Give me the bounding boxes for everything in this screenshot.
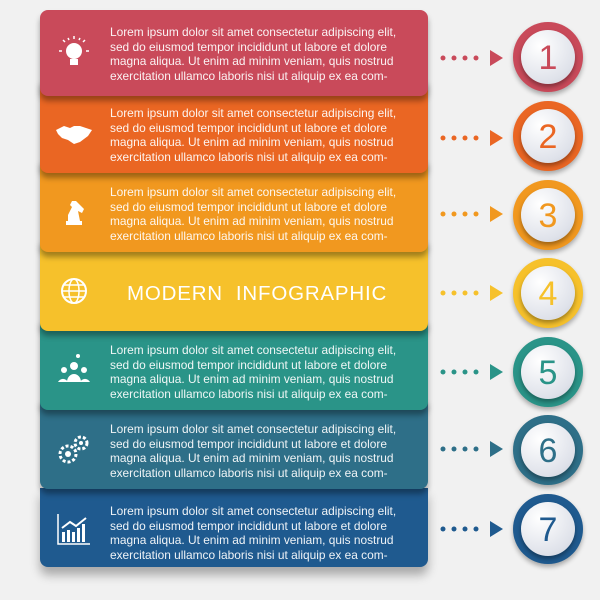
- icon: chess knight: [66, 201, 84, 225]
- circle 5: [513, 337, 583, 407]
- circle 3: [513, 180, 583, 250]
- text 5: [110, 343, 396, 401]
- text 1: Lorem ipsum dolor sit amet consectetur adipiscing elit,: [110, 25, 396, 39]
- arrow 7: [440, 521, 503, 537]
- text 7: [110, 504, 396, 562]
- circle 5: 5: [539, 354, 557, 392]
- circle 6: 6: [539, 432, 557, 470]
- arrow 6: [440, 441, 503, 457]
- text 7: Lorem ipsum dolor sit amet consectetur adipiscing elit,: [110, 504, 396, 518]
- icon: people: [58, 354, 90, 382]
- text 3: magna aliqua. Ut enim ad minim veniam, quis nostrud: [110, 214, 394, 228]
- text 3: exercitation ullamco laboris nisi ut aliquip ex ea com-: [110, 229, 388, 243]
- circle 2: [513, 101, 583, 171]
- panel 6: slate teal: [40, 400, 428, 489]
- circle 1: [513, 22, 583, 92]
- text 3: sed do eiusmod tempor incididunt ut labore et dolore: [110, 200, 387, 214]
- panel 3: amber: [40, 160, 428, 252]
- text 6: magna aliqua. Ut enim ad minim veniam, quis nostrud: [110, 451, 394, 465]
- circle 4: 4: [539, 275, 557, 313]
- text 2: magna aliqua. Ut enim ad minim veniam, quis nostrud: [110, 135, 394, 149]
- panel 4: yellow title: [40, 240, 428, 331]
- panel 2: orange: [40, 80, 428, 173]
- panel 5: teal: [40, 320, 428, 410]
- circle 7: 7: [539, 511, 557, 549]
- circle 3: 3: [539, 197, 557, 235]
- panel 7: blue: [40, 488, 428, 567]
- text 3: [110, 185, 396, 243]
- text 1: magna aliqua. Ut enim ad minim veniam, quis nostrud: [110, 54, 394, 68]
- circle 7: [513, 494, 583, 564]
- text 5: Lorem ipsum dolor sit amet consectetur adipiscing elit,: [110, 343, 396, 357]
- text 2: [110, 106, 396, 164]
- circle 1: 1: [539, 39, 557, 77]
- text 5: exercitation ullamco laboris nisi ut aliquip ex ea com-: [110, 387, 388, 401]
- text 2: Lorem ipsum dolor sit amet consectetur adipiscing elit,: [110, 106, 396, 120]
- arrow 5: [440, 364, 503, 380]
- text 7: sed do eiusmod tempor incididunt ut labore et dolore: [110, 519, 387, 533]
- text 1: exercitation ullamco laboris nisi ut aliquip ex ea com-: [110, 69, 388, 83]
- text 6: [110, 422, 396, 480]
- arrow 4: [440, 285, 503, 301]
- icon: handshake: [56, 126, 92, 144]
- icon: globe: [61, 278, 87, 304]
- text 5: sed do eiusmod tempor incididunt ut labore et dolore: [110, 358, 387, 372]
- text 3: Lorem ipsum dolor sit amet consectetur adipiscing elit,: [110, 185, 396, 199]
- text 1: sed do eiusmod tempor incididunt ut labore et dolore: [110, 40, 387, 54]
- panel 1: red: [40, 10, 428, 96]
- circle 2: 2: [539, 118, 557, 156]
- text 6: Lorem ipsum dolor sit amet consectetur adipiscing elit,: [110, 422, 396, 436]
- icon: bulb: [59, 36, 89, 65]
- text 2: exercitation ullamco laboris nisi ut aliquip ex ea com-: [110, 150, 388, 164]
- circle 4: [513, 258, 583, 328]
- text 5: magna aliqua. Ut enim ad minim veniam, quis nostrud: [110, 372, 394, 386]
- arrow 2: [440, 130, 503, 146]
- text 7: magna aliqua. Ut enim ad minim veniam, quis nostrud: [110, 533, 394, 547]
- circle 6: [513, 415, 583, 485]
- text 7: exercitation ullamco laboris nisi ut aliquip ex ea com-: [110, 548, 388, 562]
- text 6: sed do eiusmod tempor incididunt ut labore et dolore: [110, 437, 387, 451]
- text 6: exercitation ullamco laboris nisi ut aliquip ex ea com-: [110, 466, 388, 480]
- text 1: [110, 25, 396, 83]
- text 2: sed do eiusmod tempor incididunt ut labore et dolore: [110, 121, 387, 135]
- heading: modern infographic: MODERN INFOGRAPHIC: [127, 282, 387, 305]
- arrow 3: [440, 206, 503, 222]
- arrow 1: [440, 50, 503, 66]
- icon: gears: [58, 436, 88, 464]
- icon: chart: [57, 514, 90, 545]
